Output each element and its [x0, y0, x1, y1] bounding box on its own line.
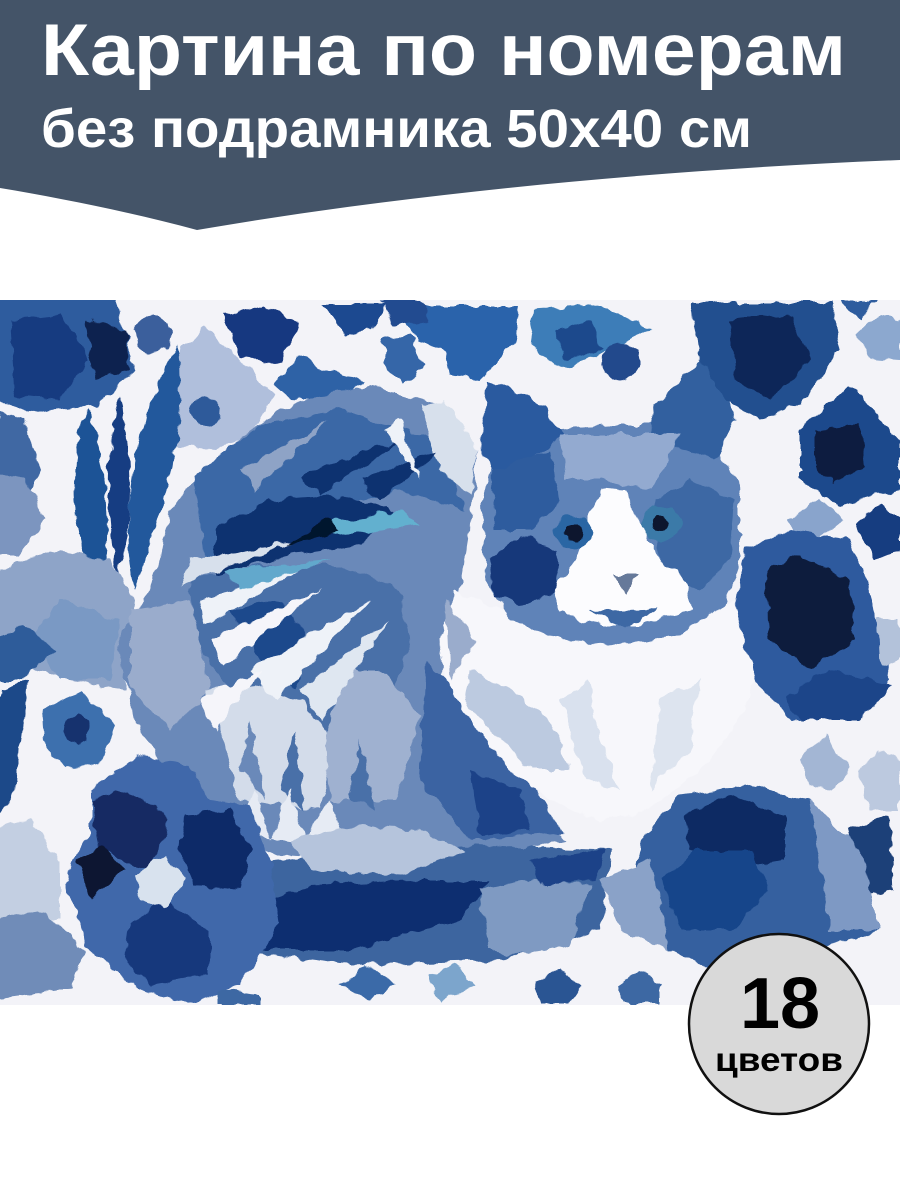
flower: bottom right rose	[600, 785, 895, 975]
cat: white muzzle	[553, 488, 690, 625]
badge label: цветов	[715, 1041, 843, 1078]
flower: left pale bloom	[0, 550, 135, 1000]
bottom floral scatter	[218, 965, 660, 1005]
cat: white chest	[438, 589, 536, 788]
title: Картина по номерам	[41, 10, 846, 91]
flower: top left tulip	[0, 295, 135, 555]
cat: left eye	[555, 515, 593, 549]
top floral scatter	[134, 300, 900, 400]
painting: blue cat among flowers	[0, 295, 900, 1005]
flower: bottom left pansy	[65, 755, 280, 1005]
cat: chin shadow	[590, 608, 660, 628]
cat: right pupil	[652, 515, 669, 532]
cat: left pupil	[565, 523, 583, 541]
header banner	[0, 0, 900, 230]
badge number: 18	[740, 964, 820, 1044]
cat: fur strokes	[180, 420, 440, 845]
flower: pale daffodil and leaves	[74, 325, 275, 590]
cat: right eye	[642, 506, 680, 540]
subtitle: без подрамника 50х40 см	[41, 99, 752, 159]
badge: 18 colours	[689, 934, 869, 1114]
flower: dark right bloom	[735, 530, 900, 810]
cat: chest shading	[445, 600, 700, 790]
cat: fluffy back and body	[118, 385, 565, 860]
flower: upper right tulips	[690, 302, 900, 560]
cat: nose	[613, 575, 640, 594]
cat: tail	[260, 824, 612, 966]
cat: head	[480, 352, 740, 645]
